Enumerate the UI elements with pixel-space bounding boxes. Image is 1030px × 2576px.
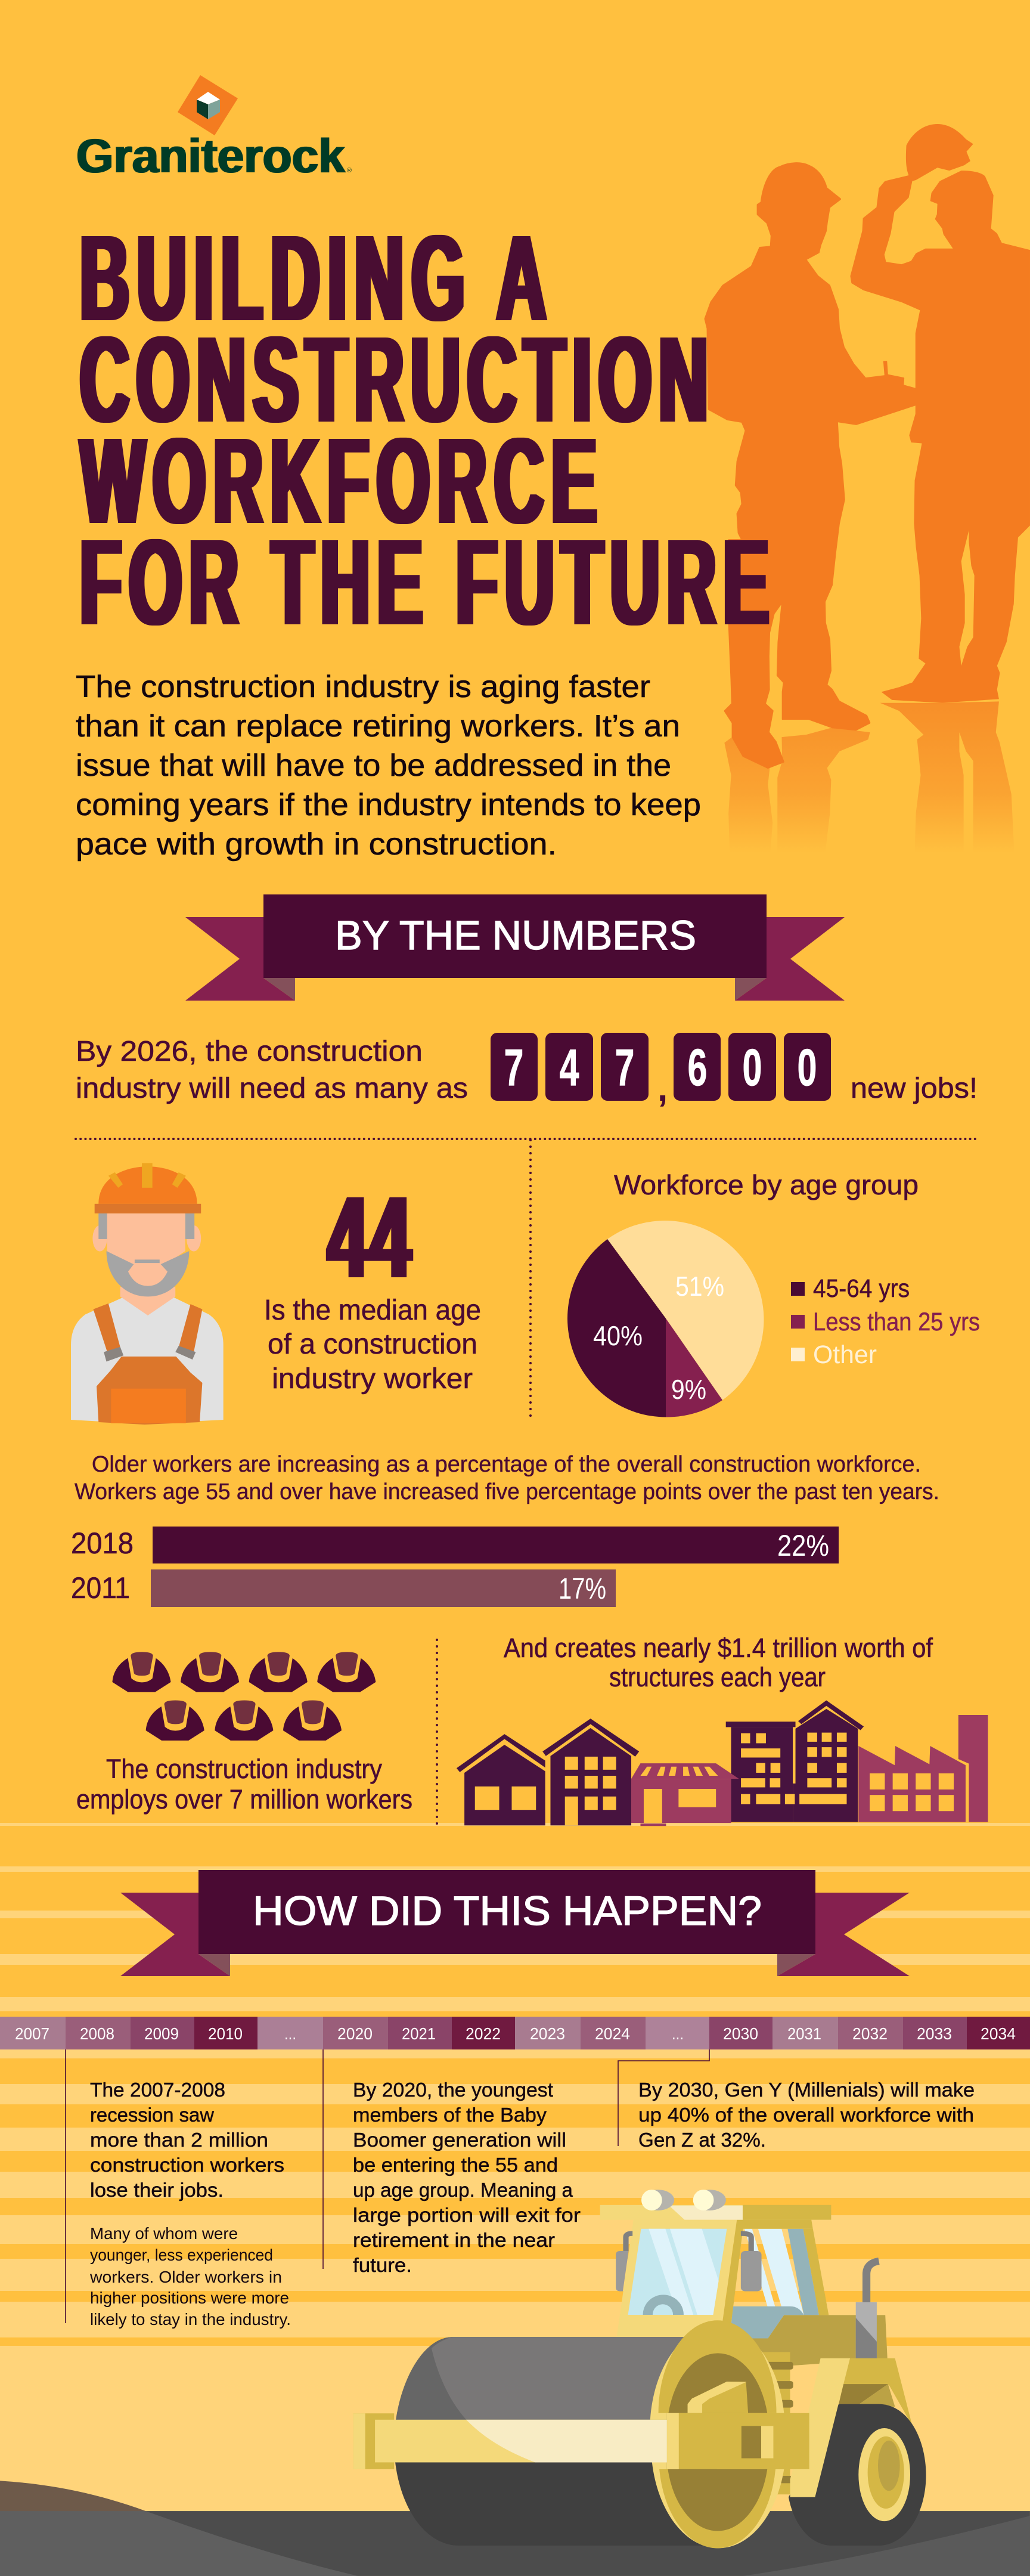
registered mark: ® [347,167,352,174]
heading text: BY THE NUMBERS [335,912,696,958]
cab [600,2205,831,2338]
intro text block: pace with growth in construction. [76,827,557,862]
timeline bar: 2023 [530,2024,565,2043]
pie slices: 40% [593,1320,643,1351]
caption: employs over 7 million workers [76,1784,412,1815]
timeline text: 2020 baby boomers: be entering the 55 and [353,2154,558,2176]
exhaust pipe [856,2261,879,2358]
timeline bar: ... [284,2024,296,2043]
drum axle bar [353,2413,668,2469]
bar 2011: 17% [559,1572,606,1605]
timeline text: 2007-2008 recession: recession saw [90,2104,214,2126]
timeline bar: 2009 [144,2024,179,2043]
timeline text: 2007-2008 recession: workers. Older workers in [89,2268,282,2286]
timeline text: 2007-2008 recession [89,2079,291,2329]
timeline bar: 2020 [337,2024,373,2043]
illustration: worker silhouettes [705,124,1030,853]
wheel hub [667,2382,809,2469]
bar 2011: 2011 [71,1571,130,1605]
timeline bar: 2033 [917,2024,952,2043]
intro text block [76,670,701,862]
title: FOR THE FUTURE [80,515,769,651]
number tiles: 0 [798,1039,817,1097]
number tiles: 7 [504,1039,523,1097]
caption: The construction industry [106,1754,382,1784]
big number 44: 44 [328,1173,411,1302]
lead text [76,1036,468,1104]
caption: structures each year [609,1662,826,1692]
timeline text: 2007-2008 recession: younger, less experienced [90,2246,273,2264]
timeline text: 2020 baby boomers [353,2079,581,2276]
number tiles: 6 [688,1039,707,1097]
timeline bar: 2022 [466,2024,501,2043]
text: older workers [75,1452,939,1504]
engine and rear body [729,2315,913,2494]
front wheel [650,2320,784,2548]
timeline text: 2020 baby boomers: large portion will exit for [353,2204,581,2226]
icon: older construction worker [71,1163,224,1425]
timeline bar: 2032 [852,2024,888,2043]
timeline bar: 2010 [208,2024,243,2043]
pie slices: 9% [671,1374,706,1405]
timeline text: 2030 gen Y: Gen Z at 32%. [638,2129,766,2151]
ribbon heading: by the numbers [185,894,845,1001]
timeline bar: ... [672,2024,684,2043]
timeline bar: 2031 [787,2024,821,2043]
timeline text: 2020 baby boomers: members of the Baby [353,2104,547,2126]
text: older workers: Older workers are increasing as a percentage of the overall construction workforce. [92,1452,921,1477]
timeline text: 2007-2008 recession: more than 2 million [90,2129,268,2151]
caption [264,1295,481,1395]
timeline bar: 2030 [723,2024,758,2043]
timeline connector lines [66,2049,709,2323]
legend: 45-64 yrs [813,1274,910,1303]
timeline text: 2030 gen Y [638,2079,975,2151]
timeline text: 2020 baby boomers: future. [353,2254,412,2276]
front drum [394,2337,720,2546]
caption [76,1754,412,1815]
timeline text: 2020 baby boomers: up age group. Meaning a [353,2179,573,2201]
stat: 747,600 new jobs [76,1033,978,1109]
timeline text: 2007-2008 recession: higher positions were more [90,2289,289,2307]
stat: 7 million workers [76,1652,412,1815]
rear wheel [789,2404,926,2546]
chart title: Workforce by age group [614,1169,919,1200]
caption: And creates nearly $1.4 trillion worth of [504,1633,933,1663]
caption: industry worker [272,1363,473,1395]
number tiles [491,1033,831,1109]
timeline bar [0,2017,1030,2049]
timeline text: 2020 baby boomers: By 2020, the youngest [353,2079,553,2101]
title: WORKFORCE [80,413,597,549]
stat: $1.4 trillion structures [457,1633,988,1826]
bar 2018 [71,1527,839,1563]
timeline text: 2020 baby boomers: retirement in the near [353,2229,555,2251]
intro text block: coming years if the industry intends to keep [76,788,701,822]
bar 2018: 2018 [71,1527,134,1560]
right worker silhouette [850,124,1030,703]
logo: Graniterock [76,75,352,183]
timeline text: 2030 gen Y: By 2030, Gen Y (Millenials) will make [638,2079,975,2101]
left worker silhouette [705,163,917,768]
closing text: new jobs! [851,1073,978,1104]
icon: hard hats [112,1652,376,1741]
timeline text: 2030 gen Y: up 40% of the overall workforce with [638,2104,974,2126]
legend [791,1274,980,1369]
timeline text: 2007-2008 recession: The 2007-2008 [90,2079,225,2101]
intro text block: The construction industry is aging faster [76,670,650,704]
number tiles: 4 [559,1039,579,1097]
logo wordmark: Graniterock [76,129,346,183]
timeline text: 2007-2008 recession: likely to stay in the industry. [90,2310,291,2329]
icon: orange diamond with cube [178,75,238,135]
number tiles: 0 [743,1039,762,1097]
bar chart: share of workers 55 and over [71,1527,839,1607]
timeline bar: 2007 [15,2024,49,2043]
ribbon heading: how did this happen [120,1870,910,1976]
legend: Other [813,1340,877,1369]
caption: Is the median age [264,1295,481,1326]
timeline bar: 2034 [981,2024,1016,2043]
legend: Less than 25 yrs [813,1308,980,1336]
title [80,210,769,651]
reflection of workers [724,701,1015,853]
stat: median age 44 [264,1173,481,1395]
timeline text: 2007-2008 recession: construction workers [90,2154,284,2176]
illustration: road roller [353,2190,926,2548]
number tiles: 7 [615,1039,634,1097]
heading text: HOW DID THIS HAPPEN? [253,1888,762,1934]
bar 2011 [71,1569,616,1607]
timeline text: 2020 baby boomers: Boomer generation will [353,2129,566,2151]
bar 2018: 22% [777,1529,829,1562]
pie slices: 51% [675,1271,724,1302]
caption [504,1633,933,1692]
timeline text: 2007-2008 recession: lose their jobs. [90,2179,224,2201]
timeline bar: 2021 [402,2024,436,2043]
ground [0,2481,1030,2576]
text: older workers: Workers age 55 and over have increased five percentage points over the past ten years. [75,1479,939,1504]
lead text: By 2026, the construction [76,1036,423,1067]
pie slices [567,1221,764,1417]
number tiles: , [657,1068,668,1109]
timeline bar: 2024 [595,2024,630,2043]
title: BUILDING A [80,210,546,346]
hood strut [790,2358,850,2497]
lead text: industry will need as many as [76,1073,468,1104]
timeline text: 2007-2008 recession: Many of whom were [90,2224,238,2243]
title: CONSTRUCTION [80,312,708,448]
timeline bar: 2008 [80,2024,114,2043]
dotted dividers [76,1139,979,1825]
background stripes [0,1823,1030,2576]
mirrors [616,2234,762,2291]
intro text block: than it can replace retiring workers. It’s an [76,709,680,744]
pie chart: workforce by age group [567,1169,980,1417]
caption: of a construction [268,1329,477,1360]
intro text block: issue that will have to be addressed in the [76,748,671,783]
headlights [641,2190,726,2210]
illustration: buildings [457,1701,988,1826]
